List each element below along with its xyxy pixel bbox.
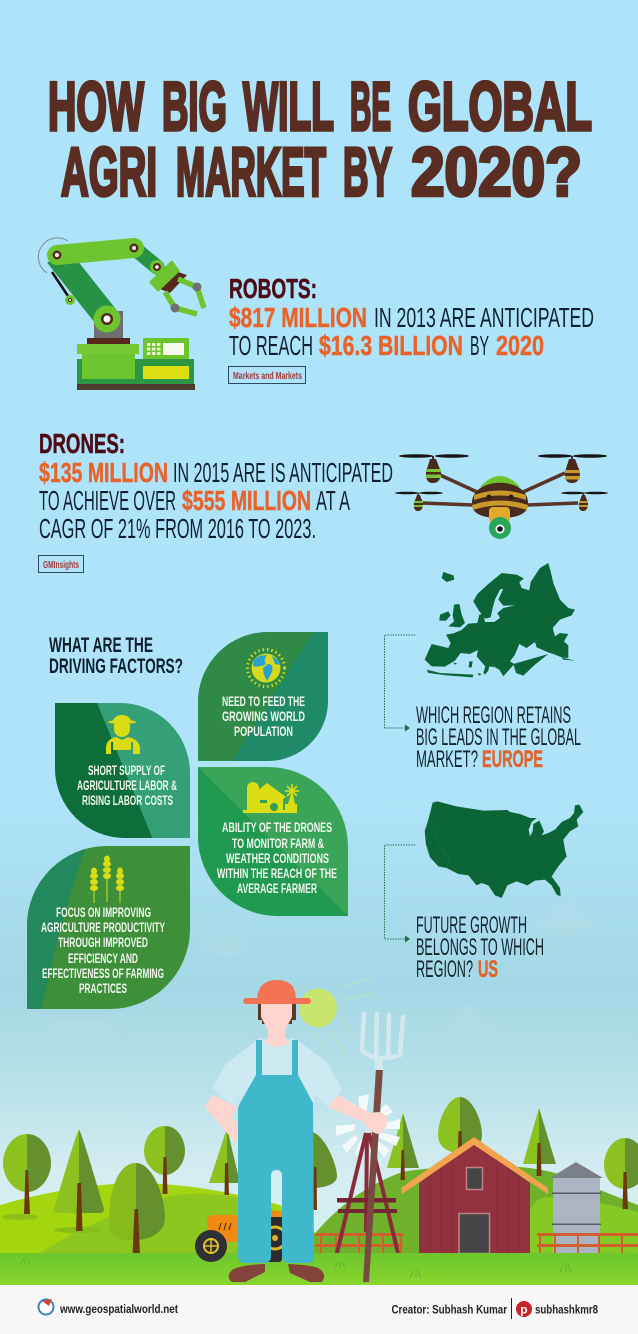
barn xyxy=(401,1137,548,1254)
text block: robots: ROBOTS: xyxy=(229,273,317,304)
text block: us question: REGION? xyxy=(416,956,473,983)
title: BE xyxy=(350,68,391,145)
text block: drones: AT A xyxy=(316,485,350,516)
leaf panel: productivity: PRACTICES xyxy=(79,981,127,996)
text block: europe question xyxy=(416,702,581,773)
hand xyxy=(369,1112,387,1134)
text block: drones: IN 2015 ARE IS ANTICIPATED xyxy=(173,457,393,488)
leaf panel: labor shortage: SHORT SUPPLY OF xyxy=(88,763,165,778)
text block: europe question: EUROPE xyxy=(482,746,543,773)
leaf panel: feed the world: NEED TO FEED THE xyxy=(222,694,305,709)
title: 2020? xyxy=(411,134,582,210)
map: europe xyxy=(425,563,575,677)
shoes xyxy=(229,1264,324,1282)
leaf panel: productivity: FOCUS ON IMPROVING xyxy=(56,905,151,920)
leaf panel: drone monitoring: ABILITY OF THE DRONES xyxy=(222,820,332,835)
arm: right xyxy=(328,1095,387,1133)
pitchfork xyxy=(362,1014,403,1282)
grass tufts xyxy=(20,1257,571,1278)
sun xyxy=(299,978,372,1062)
leaf panel: labor shortage: AGRICULTURE LABOR & xyxy=(77,778,177,793)
clouds xyxy=(46,901,600,1043)
map: united states xyxy=(425,801,583,898)
fences xyxy=(315,1233,638,1253)
connector: europe xyxy=(384,635,415,732)
heading: what are the driving factors: WHAT ARE THE xyxy=(49,634,153,657)
heading: what are the driving factors xyxy=(49,634,183,678)
leaf panel: labor shortage xyxy=(50,698,190,842)
text block: us question: US xyxy=(478,956,498,983)
icon: wheat xyxy=(90,856,124,903)
logo: geospatial world xyxy=(38,1299,54,1314)
footer: Creator: Subhash Kumar xyxy=(392,1302,507,1316)
ground xyxy=(0,1253,638,1285)
farmer xyxy=(205,980,403,1282)
leaf panel: productivity: EFFICIENCY AND xyxy=(68,951,138,966)
text block: drones: DRONES: xyxy=(39,428,125,459)
icon: robot arm xyxy=(38,238,204,390)
trees xyxy=(2,1097,638,1270)
landscape hills xyxy=(0,1167,638,1253)
source: markets and markets: Markets and Markets xyxy=(233,371,302,382)
hat xyxy=(243,980,311,1004)
leaf panel: labor shortage: RISING LABOR COSTS xyxy=(82,793,173,808)
leaf panel: drone monitoring xyxy=(198,767,348,916)
hair and head xyxy=(258,1003,296,1047)
source: markets and markets xyxy=(228,366,306,384)
text block: robots: $16.3 BILLION xyxy=(319,330,463,361)
icon: drone xyxy=(395,454,608,539)
connector: united states xyxy=(384,845,415,942)
leaf panel: productivity: AGRICULTURE PRODUCTIVITY xyxy=(41,920,165,935)
text block: us question: FUTURE GROWTH xyxy=(416,912,527,939)
icon: pinterest: p xyxy=(520,1302,528,1316)
title: AGRI xyxy=(61,134,157,210)
leaf panel: feed the world xyxy=(198,632,328,761)
text block: drones: CAGR OF 21% FROM 2016 TO 2023. xyxy=(39,513,316,544)
leaf panel: feed the world: GROWING WORLD xyxy=(222,709,305,724)
silo xyxy=(550,1162,603,1253)
leaf panel: drone monitoring: WEATHER CONDITIONS xyxy=(226,851,329,866)
text block: europe question: MARKET? xyxy=(416,746,478,773)
title: BY xyxy=(343,134,392,210)
heading: what are the driving factors: DRIVING FACTORS? xyxy=(49,655,183,678)
windmill xyxy=(336,1094,400,1253)
source: gminsights xyxy=(38,556,84,572)
leaf panel: productivity: EFFECTIVENESS OF FARMING xyxy=(42,966,164,981)
title: BIG xyxy=(162,68,227,145)
text block: robots xyxy=(229,273,594,361)
text block: drones: $555 MILLION xyxy=(182,485,311,516)
source: gminsights: GMInsights xyxy=(43,560,79,571)
title xyxy=(48,68,592,210)
leaf panel: productivity: THROUGH IMPROVED xyxy=(58,935,148,950)
icon: farm xyxy=(243,782,299,813)
leaf panel: drone monitoring: WITHIN THE REACH OF THE xyxy=(217,866,337,881)
text block: robots: BY xyxy=(470,330,489,361)
text block: drones xyxy=(39,428,393,544)
icon: pinterest xyxy=(516,1301,532,1317)
footer: www.geospatialworld.net xyxy=(59,1302,178,1316)
text block: robots: TO REACH xyxy=(229,330,313,361)
text block: drones: TO ACHIEVE OVER xyxy=(39,485,176,516)
footer: subhashkmr8 xyxy=(535,1302,598,1316)
icon: globe xyxy=(248,650,284,686)
text block: drones: $135 MILLION xyxy=(39,457,168,488)
text block: robots: 2020 xyxy=(496,330,544,361)
text block: us question xyxy=(416,912,544,983)
leaf panel: drone monitoring: AVERAGE FARMER xyxy=(237,881,317,896)
footer xyxy=(0,1285,638,1334)
overalls xyxy=(238,1040,314,1263)
leaf panel: feed the world: POPULATION xyxy=(234,724,293,739)
title: WILL xyxy=(243,68,334,145)
arm: left xyxy=(205,1095,249,1142)
shirt xyxy=(212,1038,342,1108)
leaf panel: drone monitoring: TO MONITOR FARM & xyxy=(232,836,324,851)
title: MARKET xyxy=(176,134,326,210)
tractor xyxy=(195,1211,286,1262)
icon: farm worker xyxy=(106,715,140,754)
title: HOW xyxy=(48,68,144,145)
text block: robots: $817 MILLION xyxy=(229,302,367,333)
leaf panel: productivity xyxy=(20,840,190,1012)
